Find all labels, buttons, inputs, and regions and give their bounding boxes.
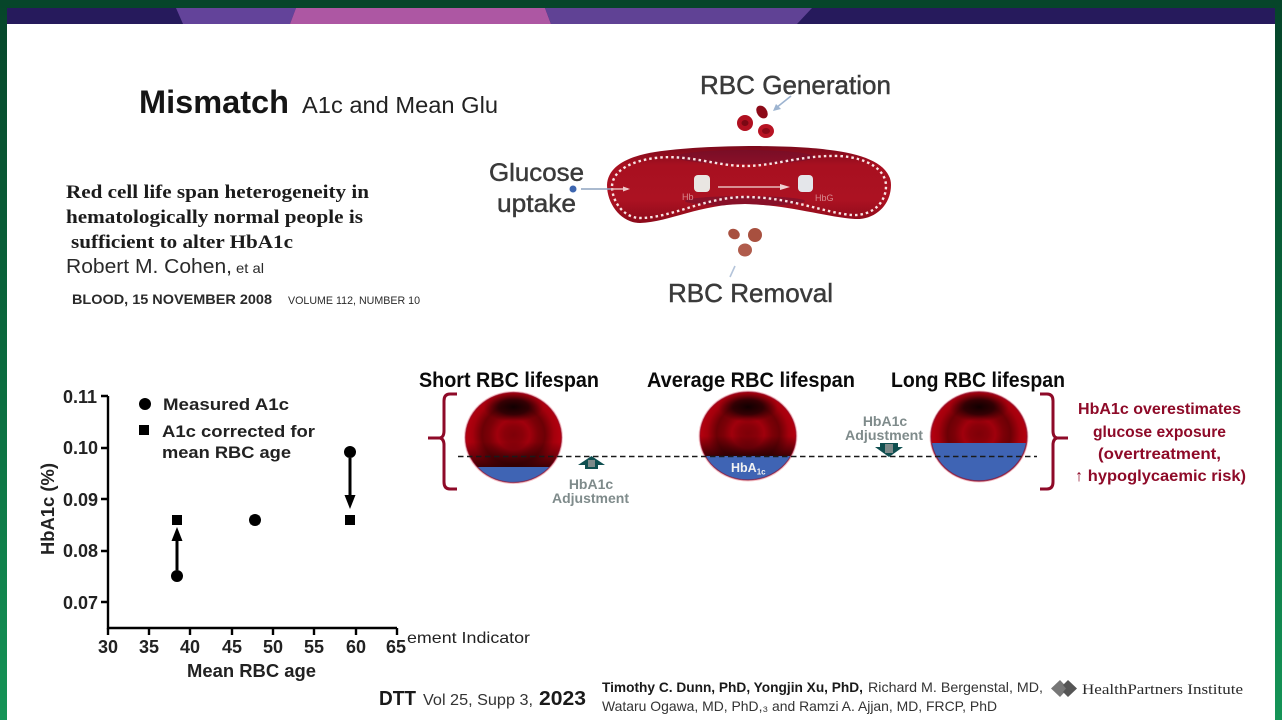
- citation: Cohen, Blood 2008: sufficient to alter HbA1c: [71, 232, 293, 253]
- legend: mean RBC age: [162, 443, 291, 462]
- x tick labels: 45: [222, 637, 242, 657]
- label: HbA1c: 1c: [757, 468, 766, 476]
- logo: HealthPartners Institute: [1051, 680, 1243, 698]
- citation: DTT 2023: [379, 688, 586, 710]
- authors: [602, 679, 1043, 714]
- authors: Wataru Ogawa, MD, PhD,₃ and Ramzi A. Ajjan, MD, FRCP, PhD: [602, 698, 997, 714]
- x tick labels: [98, 637, 406, 657]
- dashed reference line: [458, 456, 1037, 458]
- label: RBC Removal: RBC Removal: [668, 278, 833, 308]
- citation: Cohen, Blood 2008: BLOOD, 15 NOVEMBER 2008: [72, 291, 272, 307]
- arrow: downward adjustment: [875, 443, 903, 457]
- data points and arrows: [171, 446, 356, 582]
- red cell: long lifespan: [930, 390, 1028, 483]
- x tick labels: 40: [180, 637, 200, 657]
- x axis title: Mean RBC age: [187, 661, 316, 681]
- x tick labels: 60: [346, 637, 366, 657]
- axes: [101, 396, 397, 635]
- arrow: Hb to HbG: [718, 184, 790, 190]
- heading: Long RBC lifespan: Long RBC lifespan: [891, 369, 1065, 392]
- label: HbA1c adjustment, upper: [845, 413, 923, 443]
- legend: [139, 395, 315, 462]
- label: HbA1c: HbA: [731, 461, 757, 475]
- chart: HbA1c vs mean RBC age: [38, 387, 406, 681]
- y tick labels: 0.08: [63, 541, 98, 561]
- logo: HealthPartners Institute: HealthPartners Institute: [1082, 682, 1243, 698]
- label: HbA1c adjustment, lower: Adjustment: [552, 490, 629, 506]
- callout: HbA1c overestimates: glucose exposure: [1093, 424, 1226, 441]
- legend: Measured A1c: [163, 395, 289, 414]
- callout: HbA1c overestimates: [1075, 401, 1246, 485]
- y tick labels: 0.11: [63, 387, 97, 407]
- heading: Average RBC lifespan: Average RBC lifespan: [647, 369, 855, 392]
- label: HbA1c adjustment, lower: HbA1c: [569, 476, 613, 492]
- HbG molecule: HbG: [815, 193, 834, 203]
- label: Glucose uptake: [489, 159, 630, 218]
- callout: HbA1c overestimates: HbA1c overestimates: [1078, 401, 1241, 418]
- citation: DTT 2023: DTT: [379, 688, 416, 710]
- label: HbA1c adjustment, lower: [552, 476, 629, 506]
- icon: removed red cells: [726, 227, 762, 256]
- y tick labels: 0.09: [63, 490, 98, 510]
- header band: [7, 8, 1275, 24]
- citation: DTT 2023: Vol 25, Supp 3,: [423, 692, 533, 709]
- y tick labels: 0.10: [63, 438, 98, 458]
- x tick labels: 65: [386, 637, 406, 657]
- partially hidden text: ement Indicator: ement Indicator: [407, 630, 531, 647]
- arrow: upward adjustment: [578, 456, 605, 469]
- x tick labels: 50: [263, 637, 283, 657]
- x tick labels: 30: [98, 637, 118, 657]
- red cell body: [607, 146, 891, 223]
- callout: HbA1c overestimates: ↑ hypoglycaemic risk): [1075, 468, 1246, 485]
- HbG molecule: [798, 175, 834, 203]
- title: [139, 84, 498, 120]
- label: HbA1c adjustment, upper: Adjustment: [845, 427, 923, 443]
- Hb molecule: Hb: [682, 192, 694, 202]
- label: HbA1c adjustment, upper: HbA1c: [863, 413, 907, 429]
- Hb molecule: [682, 175, 710, 202]
- y tick labels: [63, 387, 98, 613]
- y tick labels: 0.07: [63, 593, 98, 613]
- authors: Richard M. Bergenstal, MD,: [868, 679, 1043, 695]
- heading: Short RBC lifespan: Short RBC lifespan: [419, 369, 599, 392]
- diagram: RBC glycation: [489, 70, 891, 308]
- authors: Timothy C. Dunn, PhD, Yongjin Xu, PhD,: [602, 679, 863, 695]
- icon: new red cells: [737, 103, 774, 138]
- left bracket: [428, 394, 457, 489]
- legend: A1c corrected for: [162, 422, 315, 441]
- y axis title: HbA1c (%): [38, 463, 58, 555]
- x tick labels: 55: [304, 637, 324, 657]
- title: Mismatch: [139, 84, 289, 120]
- x tick labels: 35: [139, 637, 159, 657]
- label: RBC Generation: RBC Generation: [700, 70, 891, 100]
- citation: DTT 2023: 2023: [539, 688, 586, 710]
- callout: HbA1c overestimates: (overtreatment,: [1098, 446, 1221, 463]
- citation: Cohen, Blood 2008: [66, 182, 420, 307]
- red cell: average lifespan: [698, 390, 798, 482]
- right bracket: [1040, 394, 1068, 489]
- red cell: short lifespan: [464, 391, 563, 484]
- label: Glucose uptake: Glucose: [489, 159, 584, 187]
- citation: Cohen, Blood 2008: hematologically normal people is: [66, 207, 363, 228]
- citation: Cohen, Blood 2008: VOLUME 112, NUMBER 10: [288, 295, 420, 307]
- citation: Cohen, Blood 2008: Robert M. Cohen,: [66, 256, 232, 278]
- citation: Cohen, Blood 2008: et al: [236, 260, 264, 276]
- label: Glucose uptake: uptake: [497, 190, 576, 218]
- title: A1c and Mean Glu: [302, 92, 498, 118]
- citation: Cohen, Blood 2008: Red cell life span heterogeneity in: [66, 182, 369, 203]
